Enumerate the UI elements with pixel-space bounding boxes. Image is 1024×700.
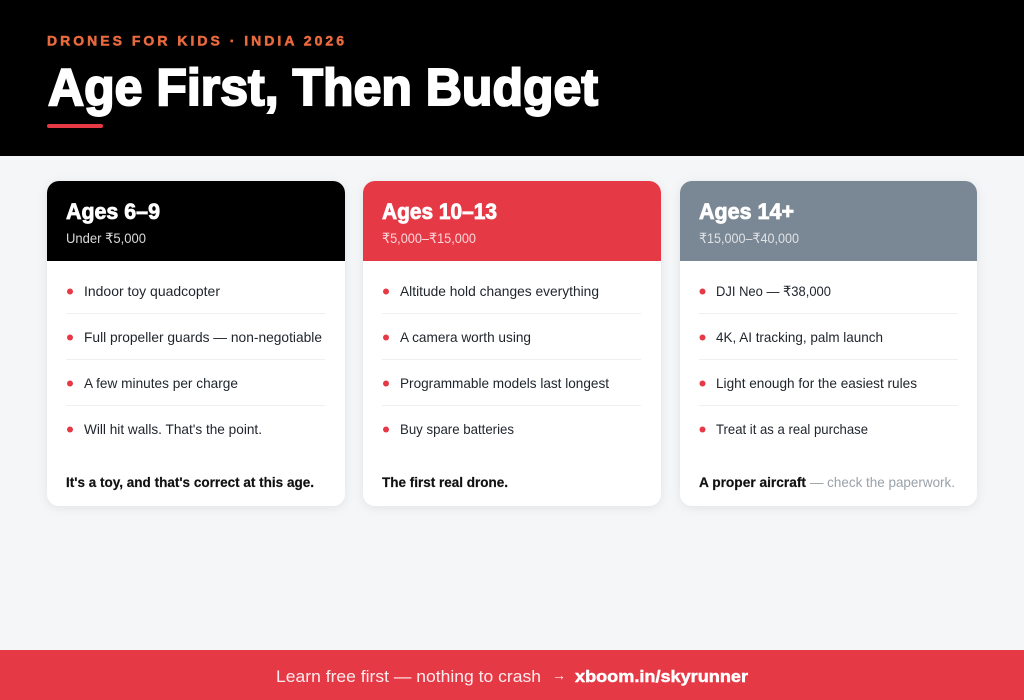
list: ages 6–9: Full propeller guards — non-negotiable: [84, 329, 322, 345]
list: ages 6–9: [66, 283, 325, 437]
list: ages 6–9: Indoor toy quadcopter: [84, 283, 220, 299]
list: ages 14+: Treat it as a real purchase: [716, 421, 868, 437]
card header: ages 10–13: Ages 10–13: [382, 199, 497, 224]
card header: ages 14+: [680, 181, 977, 261]
arrow: →: [552, 667, 566, 683]
card header: ages 14+: Ages 14+: [699, 199, 794, 224]
eyebrow: DRONES FOR KIDS · INDIA 2026: [47, 32, 344, 48]
card header: ages 6–9: Ages 6–9: [66, 199, 160, 224]
list: ages 10–13: Buy spare batteries: [400, 421, 514, 437]
verdict: ages 6–9: It's a toy, and that's correct at this age.: [66, 474, 314, 490]
verdict: ages 10–13: The first real drone.: [382, 474, 508, 490]
list: ages 14+: [699, 283, 958, 437]
list: ages 6–9: A few minutes per charge: [84, 375, 238, 391]
list: ages 14+: 4K, AI tracking, palm launch: [716, 329, 883, 345]
list: ages 6–9: Will hit walls. That's the point.: [84, 421, 262, 437]
card header: ages 10–13: ₹5,000–₹15,000: [382, 230, 476, 246]
list: ages 10–13: Programmable models last longest: [400, 375, 609, 391]
cta text: Learn free first — nothing to crash: [276, 667, 541, 686]
verdict: ages 14+: — check the paperwork.: [810, 474, 955, 490]
list: ages 10–13: [382, 283, 641, 437]
list: ages 14+: DJI Neo — ₹38,000: [716, 283, 831, 299]
list: ages 14+: Light enough for the easiest rules: [716, 375, 917, 391]
card header: ages 14+: ₹15,000–₹40,000: [699, 230, 799, 246]
card header: ages 6–9: [47, 181, 345, 261]
title accent bar: [47, 124, 103, 128]
verdict: ages 14+: A proper aircraft: [699, 474, 806, 490]
list: ages 10–13: A camera worth using: [400, 329, 531, 345]
cta link: xboom.in/skyrunner: [575, 667, 748, 686]
title: Age First, Then Budget: [48, 59, 598, 117]
list: ages 10–13: Altitude hold changes everything: [400, 283, 599, 299]
card header: ages 10–13: [363, 181, 661, 261]
verdict: ages 14+: [699, 474, 955, 490]
footer call-to-action band: [0, 650, 1024, 700]
panel: ages 6–9: [47, 181, 345, 506]
panel: ages 14+: [680, 181, 977, 506]
header banner: [0, 0, 1024, 156]
card header: ages 6–9: Under ₹5,000: [66, 230, 146, 246]
panel: ages 10–13: [363, 181, 661, 506]
